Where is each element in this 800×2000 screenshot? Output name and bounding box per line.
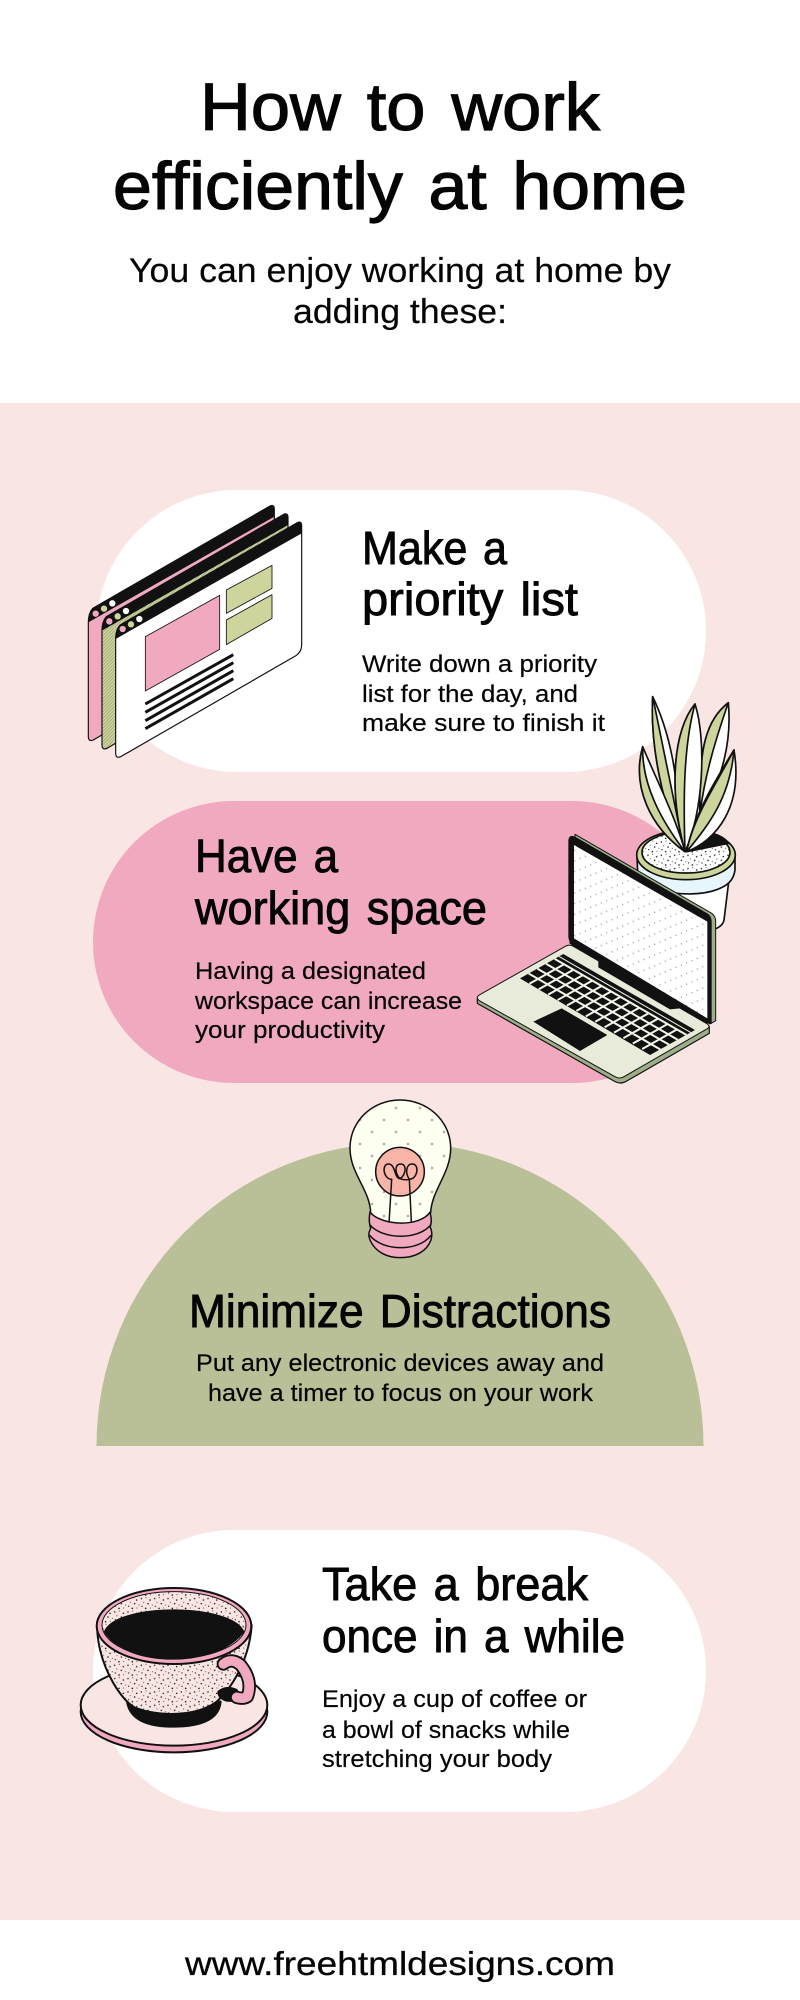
icon: coffee cup: [81, 1588, 267, 1752]
white pill: [93, 1530, 706, 1812]
heading: Have a: [195, 830, 338, 882]
icon: potted plant: [637, 697, 736, 930]
panel: make a priority list: [88, 490, 706, 772]
title: How to work: [200, 70, 601, 145]
body text: your productivity: [195, 1017, 386, 1044]
panel: take a break: [81, 1530, 706, 1812]
heading: Make a: [362, 522, 507, 574]
body text: list for the day, and: [362, 681, 578, 708]
body text: Put any electronic devices away and: [196, 1350, 604, 1377]
body text: Enjoy a cup of coffee or: [322, 1686, 587, 1713]
white pill: [96, 490, 706, 772]
heading: [362, 522, 578, 625]
body text: [322, 1686, 587, 1773]
icon: browser windows: [88, 505, 302, 757]
icon: laptop: [477, 834, 716, 1083]
pink background band: [0, 403, 800, 1920]
pink pill: [93, 801, 713, 1083]
body text: Having a designated: [195, 958, 426, 985]
body text: Write down a priority: [362, 651, 598, 678]
body text: have a timer to focus on your work: [208, 1380, 594, 1407]
title: efficiently at home: [113, 149, 687, 224]
icon: light bulb: [350, 1100, 451, 1258]
body text: a bowl of snacks while: [322, 1717, 570, 1744]
body text: stretching your body: [322, 1746, 553, 1773]
heading: working space: [194, 882, 487, 934]
subtitle: adding these:: [293, 293, 507, 331]
panel: have a working space: [93, 697, 736, 1083]
olive semicircle: [96, 1142, 704, 1446]
subtitle: You can enjoy working at home by: [129, 252, 671, 290]
body text: [196, 1350, 604, 1407]
footer url: www.freehtmldesigns.com: [184, 1945, 615, 1982]
heading: [194, 830, 487, 934]
heading: once in a while: [322, 1610, 625, 1662]
body text: [362, 651, 605, 737]
body text: [194, 958, 462, 1044]
heading: Take a break: [322, 1558, 589, 1610]
panel: minimize distractions: [96, 1100, 704, 1446]
title: [113, 70, 687, 224]
subtitle: [129, 252, 671, 331]
heading: priority list: [362, 573, 578, 625]
heading: [322, 1558, 625, 1662]
body text: workspace can increase: [194, 988, 462, 1015]
heading: Minimize Distractions: [189, 1285, 611, 1337]
body text: make sure to finish it: [362, 710, 605, 737]
